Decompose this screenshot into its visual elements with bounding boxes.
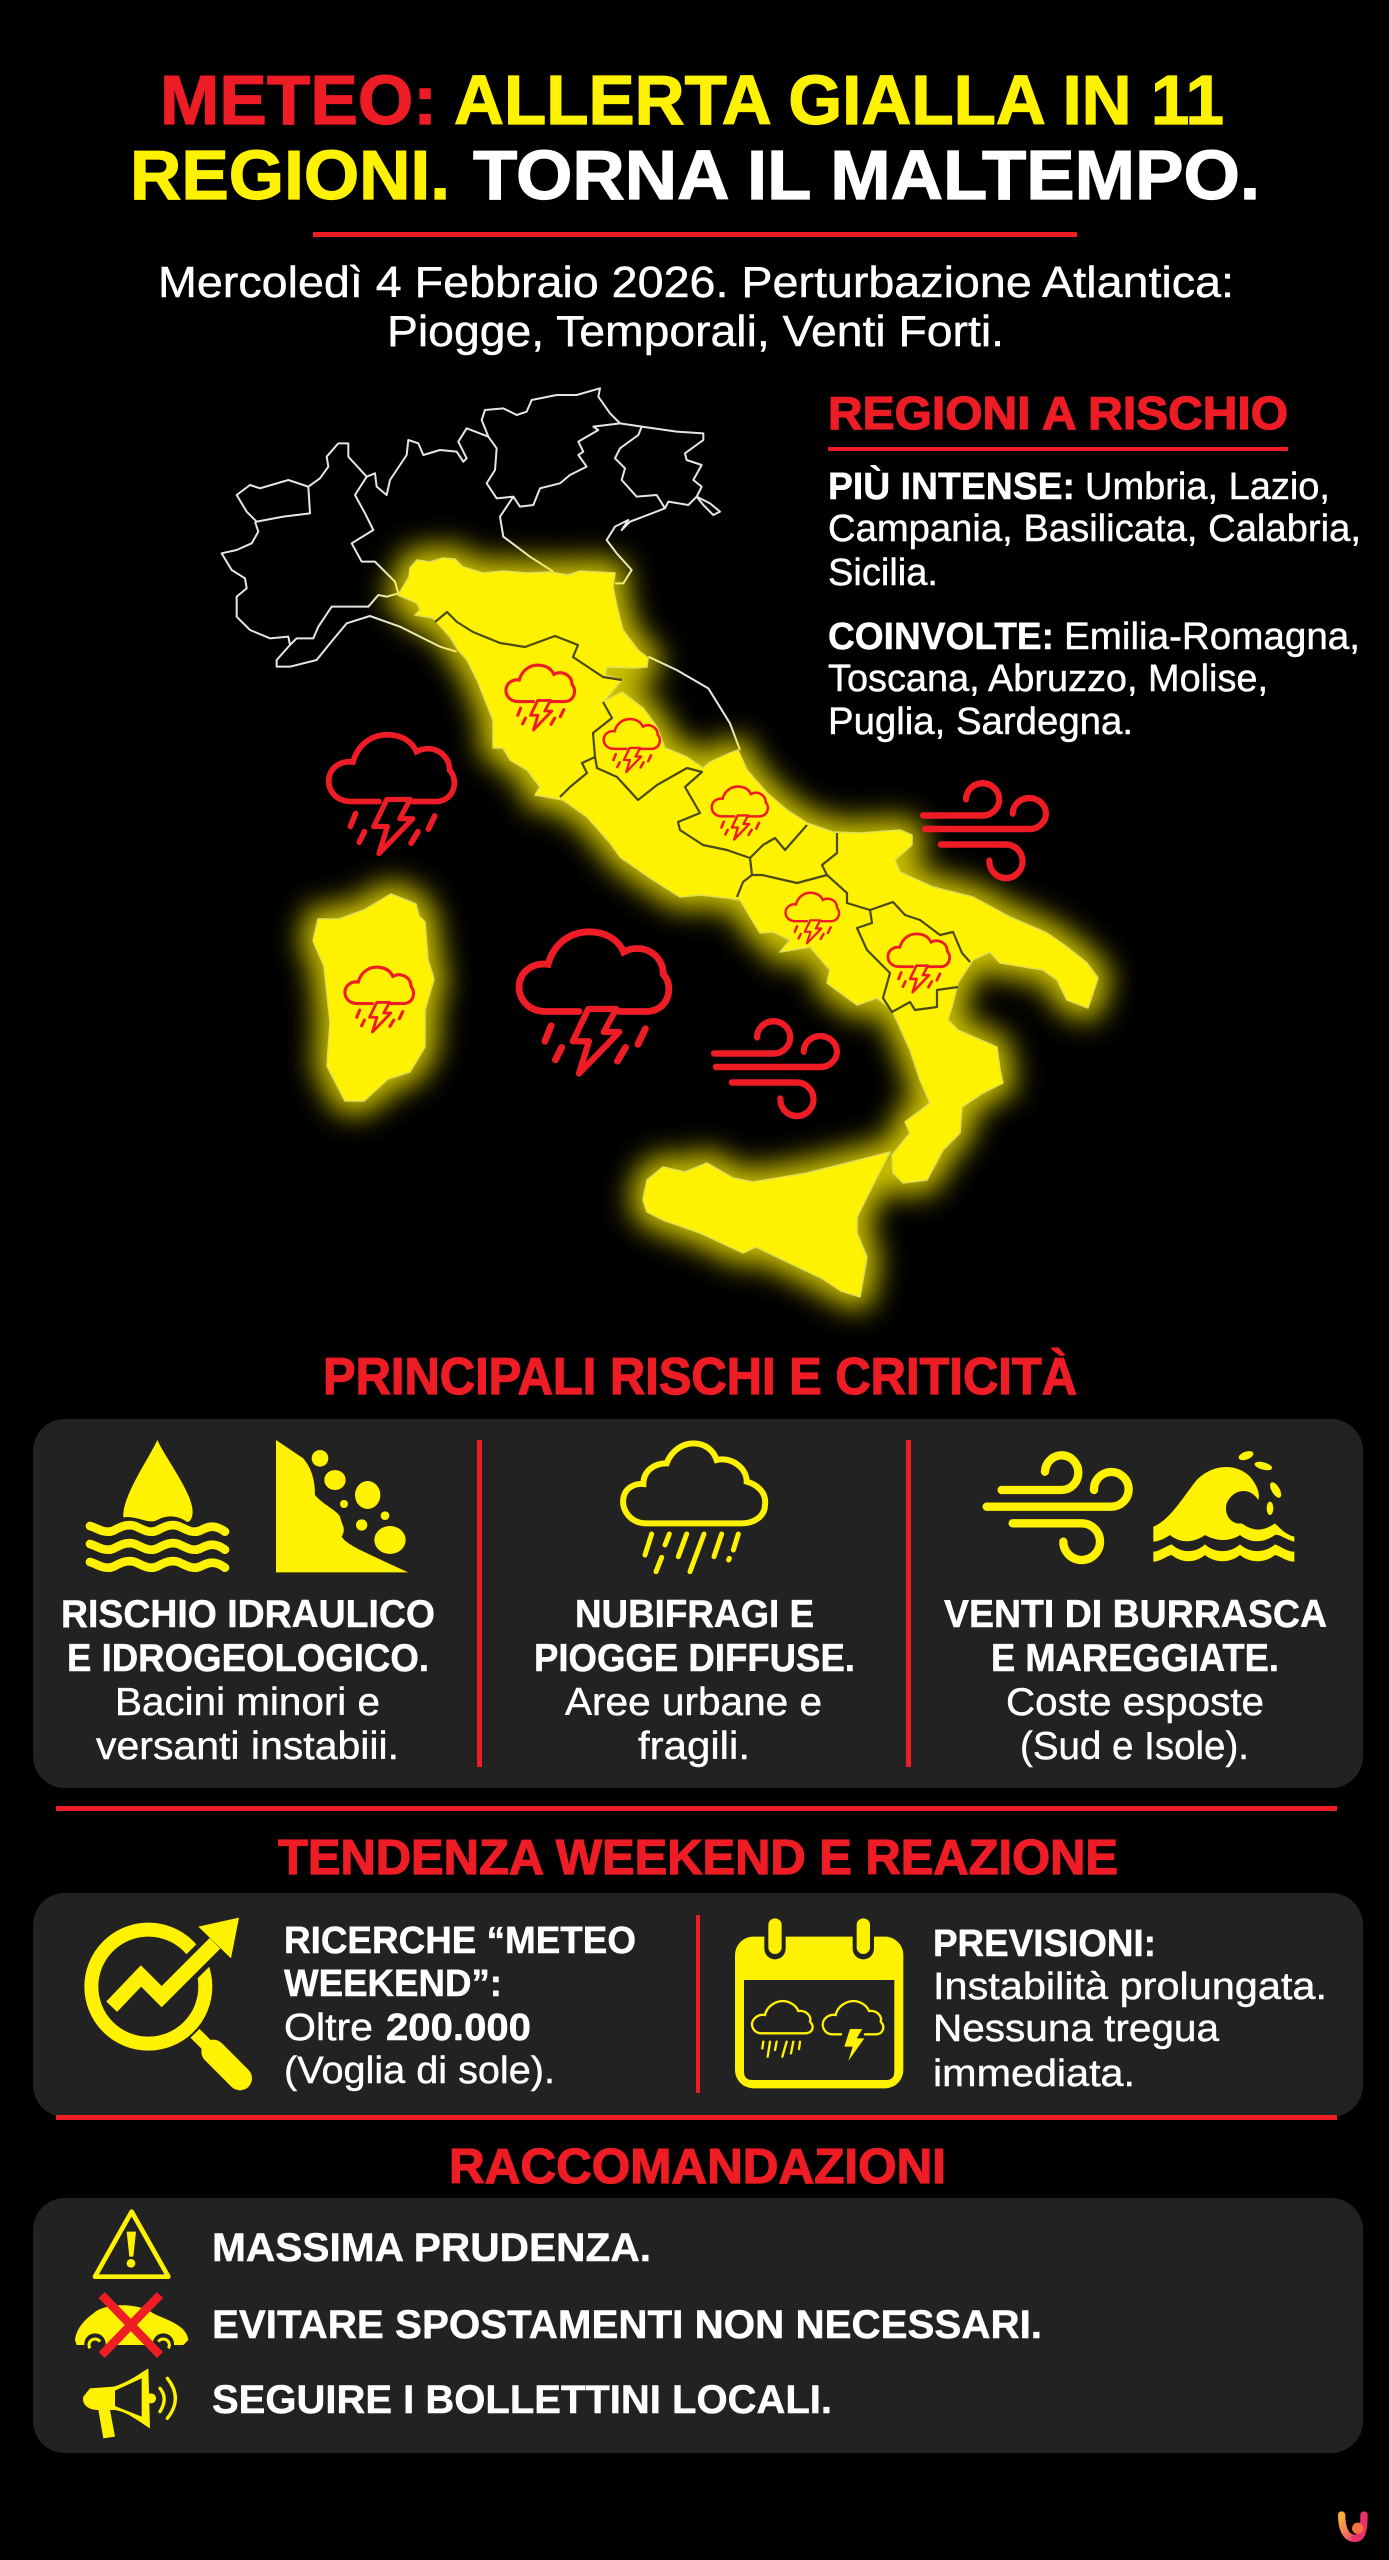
column: nubifragi: Aree urbane e [565,1681,822,1724]
recommendation list: MASSIMA PRUDENZA. [212,2226,651,2270]
column: venti: (Sud e Isole). [1020,1725,1249,1768]
subtitle: Mercoledì 4 Febbraio 2026. Perturbazione Atlantica: [158,258,1234,307]
subtitle [158,258,1234,356]
recommendation list: EVITARE SPOSTAMENTI NON NECESSARI. [212,2303,1042,2347]
icon: landslide [276,1440,408,1572]
text: ricerche: (Voglia di sole). [284,2050,555,2092]
icon: logo [1342,2515,1364,2538]
text: previsioni: Nessuna tregua [933,2008,1220,2050]
column: nubifragi: PIOGGE DIFFUSE. [534,1637,855,1680]
heading: tendenza: TENDENZA WEEKEND E REAZIONE [278,1831,1118,1885]
yellow regions [313,558,1098,1297]
column: venti [944,1593,1327,1768]
icon: wind [987,1455,1129,1560]
icon: sea wave [1153,1449,1294,1562]
panel: regioni a rischio: Umbria, Lazio, [1085,466,1330,508]
column: nubifragi: fragili. [638,1725,750,1768]
panel: rischi [33,1419,1363,1788]
title [130,61,1260,214]
storm icons on regions [345,665,950,1032]
column: nubifragi [534,1593,855,1768]
text: ricerche: Oltre [284,2007,373,2049]
wind icon: east [923,783,1046,878]
recommendation list: SEGUIRE I BOLLETTINI LOCALI. [212,2378,832,2422]
text: ricerche: RICERCHE “METEO [284,1920,636,1962]
column: rischio idraulico: versanti instabiii. [96,1725,399,1768]
text: ricerche [284,1920,636,2092]
panel: raccomandazioni [33,2198,1363,2453]
icon: water drop and waves [90,1440,225,1568]
region borders [435,612,970,1012]
northern regions outline [222,388,740,750]
column: rischio idraulico: Bacini minori e [115,1681,380,1724]
column: rischio idraulico [61,1593,435,1768]
subtitle: Piogge, Temporali, Venti Forti. [387,307,1004,356]
icon: warning [95,2212,168,2277]
icon: car crossed [75,2295,188,2355]
wind icon: tyrrhenian [714,1021,837,1116]
text: previsioni: PREVISIONI: [933,1923,1156,1965]
panel: regioni a rischio: COINVOLTE: [828,616,1054,658]
heading: raccomandazioni: RACCOMANDAZIONI [449,2140,946,2194]
icon: calendar [735,1914,903,2088]
text: previsioni: Instabilità prolungata. [933,1966,1327,2008]
storm icon: sea centre [519,932,669,1073]
panel: regioni a rischio: Puglia, Sardegna. [828,701,1133,743]
panel: regioni a rischio: Campania, Basilicata, Calabria, [828,508,1361,550]
text: previsioni [933,1923,1327,2095]
text: previsioni: immediata. [933,2053,1135,2095]
column: rischio idraulico: RISCHIO IDRAULICO [61,1593,435,1636]
title: TORNA IL MALTEMPO. [473,136,1260,214]
recommendation list [212,2226,1042,2422]
panel: regioni a rischio: Emilia-Romagna, [1064,616,1360,658]
panel: regioni a rischio: PIÙ INTENSE: [828,464,1075,508]
panel: regioni a rischio: Sicilia. [828,552,938,594]
text: ricerche: WEEKEND”: [284,1963,502,2005]
panel: regioni a rischio [828,387,1361,743]
column: venti: E MAREGGIATE. [991,1637,1279,1680]
column: venti: Coste esposte [1006,1681,1264,1724]
panel: regioni a rischio: REGIONI A RISCHIO [828,387,1288,439]
title: REGIONI. [130,136,450,214]
title: ALLERTA GIALLA IN 11 [454,61,1224,139]
icon: magnifier with rising arrow [91,1918,240,2078]
heading: principali rischi: PRINCIPALI RISCHI E CRITICITÀ [323,1348,1077,1406]
icon: rain cloud [623,1443,765,1572]
map of Italy [222,388,1098,1297]
storm icon: sea left [329,735,454,854]
column: nubifragi: NUBIFRAGI E [575,1593,814,1636]
title: METEO: [160,61,437,139]
text: ricerche: 200.000 [386,2007,531,2049]
column: rischio idraulico: E IDROGEOLOGICO. [67,1637,429,1680]
column: venti: VENTI DI BURRASCA [944,1593,1327,1636]
panel: tendenza [33,1893,1363,2117]
panel: regioni a rischio: Toscana, Abruzzo, Molise, [828,658,1268,700]
icon: megaphone [83,2368,175,2438]
glow [313,558,1098,1297]
